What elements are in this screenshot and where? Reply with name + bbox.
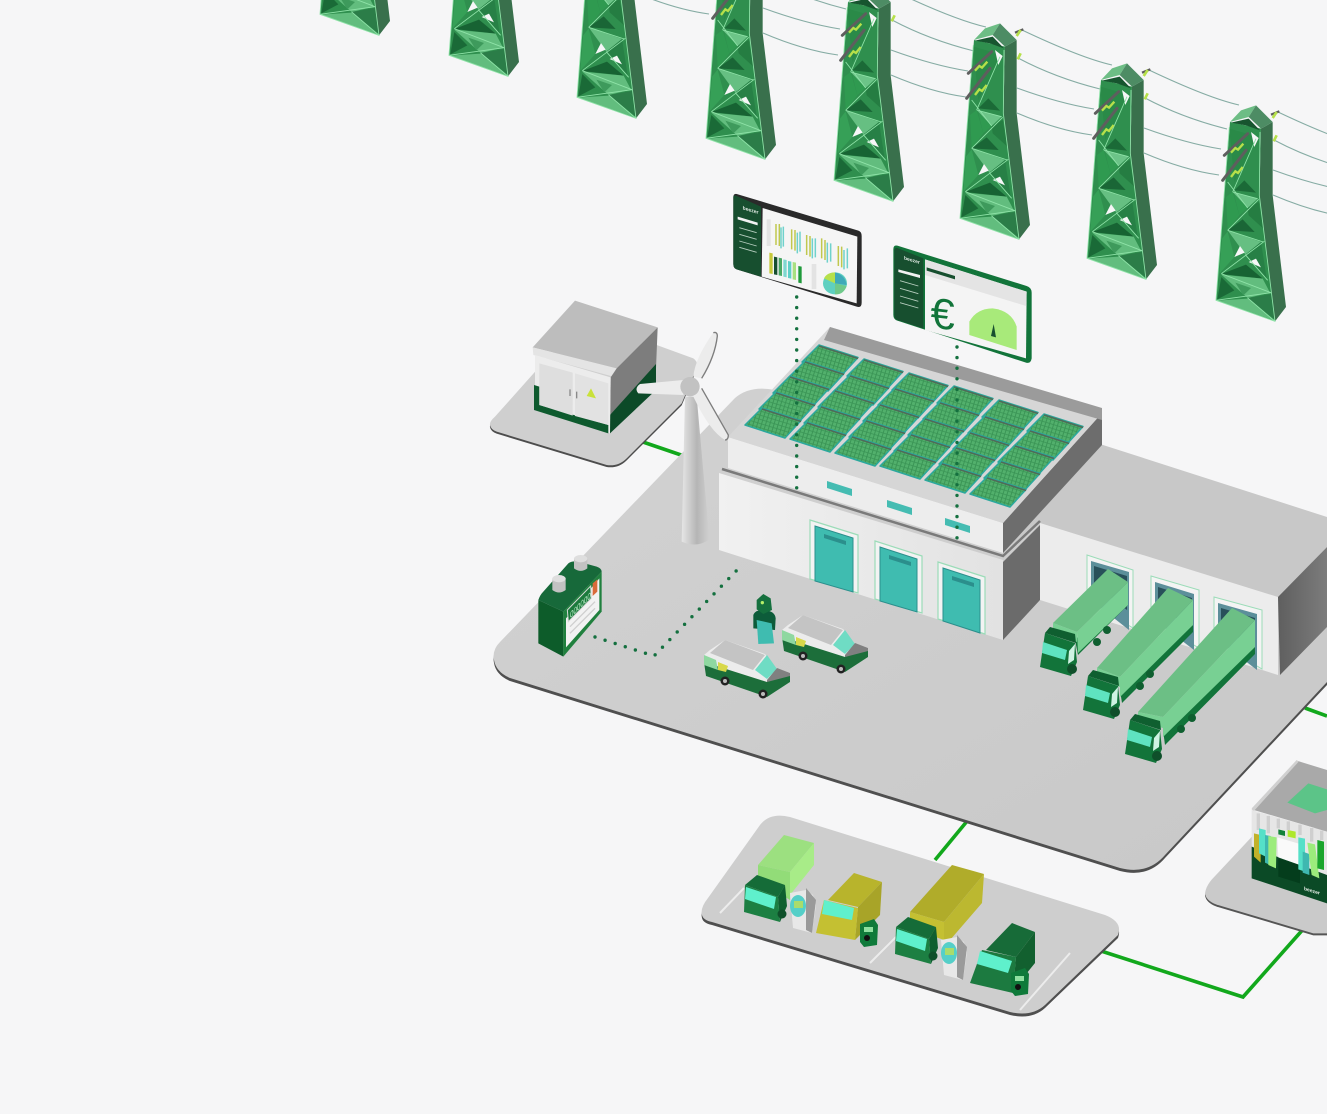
transformer platform — [490, 301, 697, 467]
main platform — [494, 389, 1327, 873]
loading bay doors — [1087, 555, 1262, 670]
power line wires — [634, 0, 1327, 217]
green van and charger — [970, 923, 1035, 996]
olive truck and charger — [895, 865, 984, 980]
green connector lines — [640, 441, 1327, 997]
solar panel array — [745, 345, 1083, 507]
dashboard screen: cost gauge: beezer — [904, 255, 920, 266]
dashboard screen: cost gauge — [893, 245, 1032, 363]
battery storage unit — [1252, 760, 1327, 903]
dashboard screen: analytics — [733, 194, 862, 307]
yellow van and charger — [816, 873, 882, 947]
row of transmission towers — [320, 0, 1286, 321]
truck 1 — [1040, 569, 1128, 676]
windows — [827, 481, 970, 533]
worker figure — [753, 594, 776, 644]
entrance doors — [810, 520, 985, 634]
battery storage unit: beezer — [1304, 886, 1320, 897]
light green truck and charger — [744, 835, 816, 933]
truck 2 — [1083, 588, 1193, 719]
charging platform — [702, 816, 1119, 1016]
storage platform — [1205, 760, 1327, 935]
warehouse — [1003, 443, 1327, 675]
transformer box — [533, 301, 658, 433]
dotted data links — [595, 297, 957, 656]
long trucks at loading bays — [1040, 569, 1255, 763]
gas meter: 000000 — [570, 590, 591, 620]
dashboard screen: cost gauge: € — [931, 289, 955, 340]
truck 3 — [1125, 608, 1255, 763]
gas meter — [538, 555, 602, 657]
service vans — [704, 615, 868, 698]
wind turbine — [637, 332, 728, 545]
main building — [719, 327, 1102, 640]
dashboard screen: analytics: beezer — [743, 205, 759, 216]
